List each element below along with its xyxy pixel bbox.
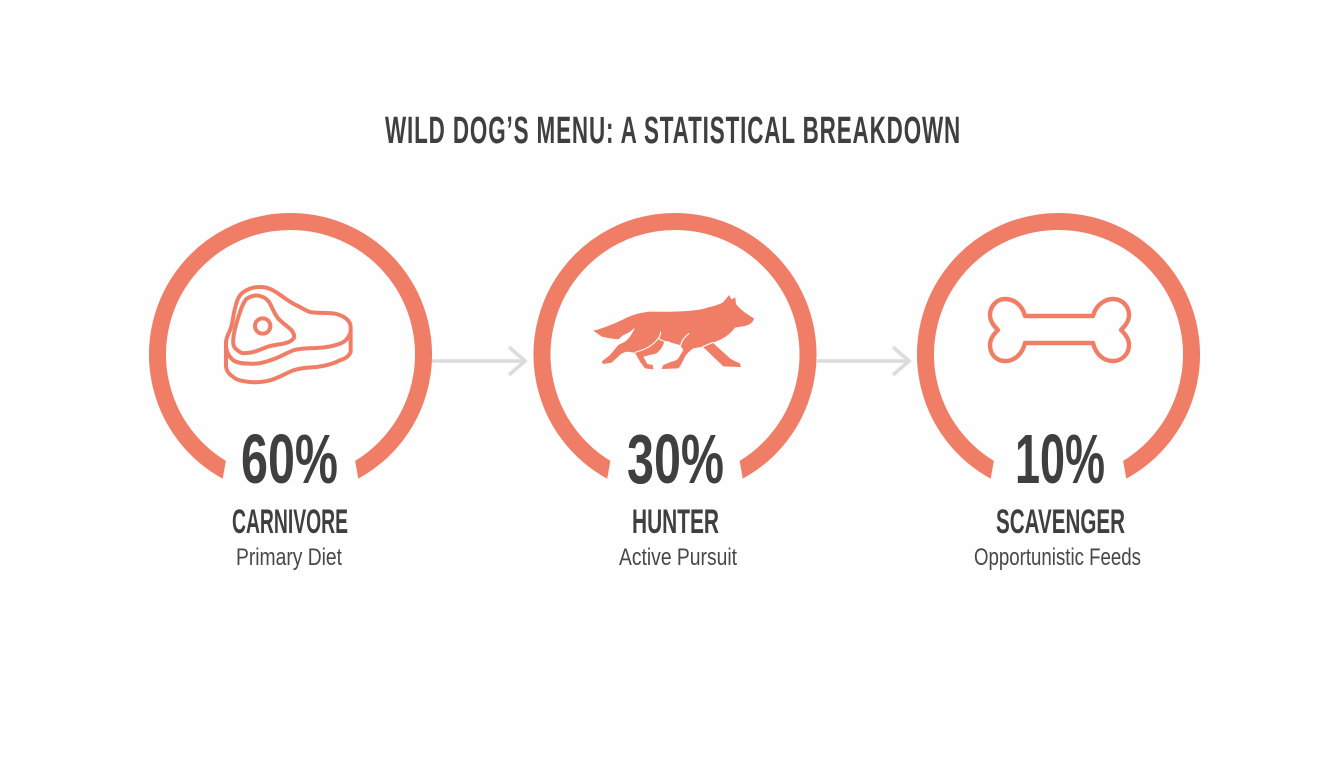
arrow: hunter to scavenger [817,347,909,375]
panel: carnivore [158,221,424,571]
caption: primary diet: Primary Diet [236,544,342,571]
progress ring: hunter [542,221,808,500]
icon: steak [226,287,351,382]
panel: hunter [542,221,808,571]
icon: running wolf [593,295,754,369]
caption: opportunistic feeds: Opportunistic Feeds [974,544,1141,571]
label: hunter: HUNTER [632,503,719,541]
stat: 10%: 10% [1015,420,1105,498]
progress ring: carnivore [158,221,424,500]
arrow: carnivore to hunter [432,347,525,375]
icon: bone [990,299,1129,361]
title: WILD DOG’S MENU: A STATISTICAL BREAKDOWN [385,109,960,152]
label: scavenger: SCAVENGER [996,503,1125,541]
panel: scavenger [926,221,1192,571]
stat: 30%: 30% [627,420,724,498]
stat: 60%: 60% [241,420,338,498]
caption: active pursuit: Active Pursuit [619,544,737,571]
label: carnivore: CARNIVORE [232,503,348,541]
progress ring: scavenger [926,221,1192,500]
